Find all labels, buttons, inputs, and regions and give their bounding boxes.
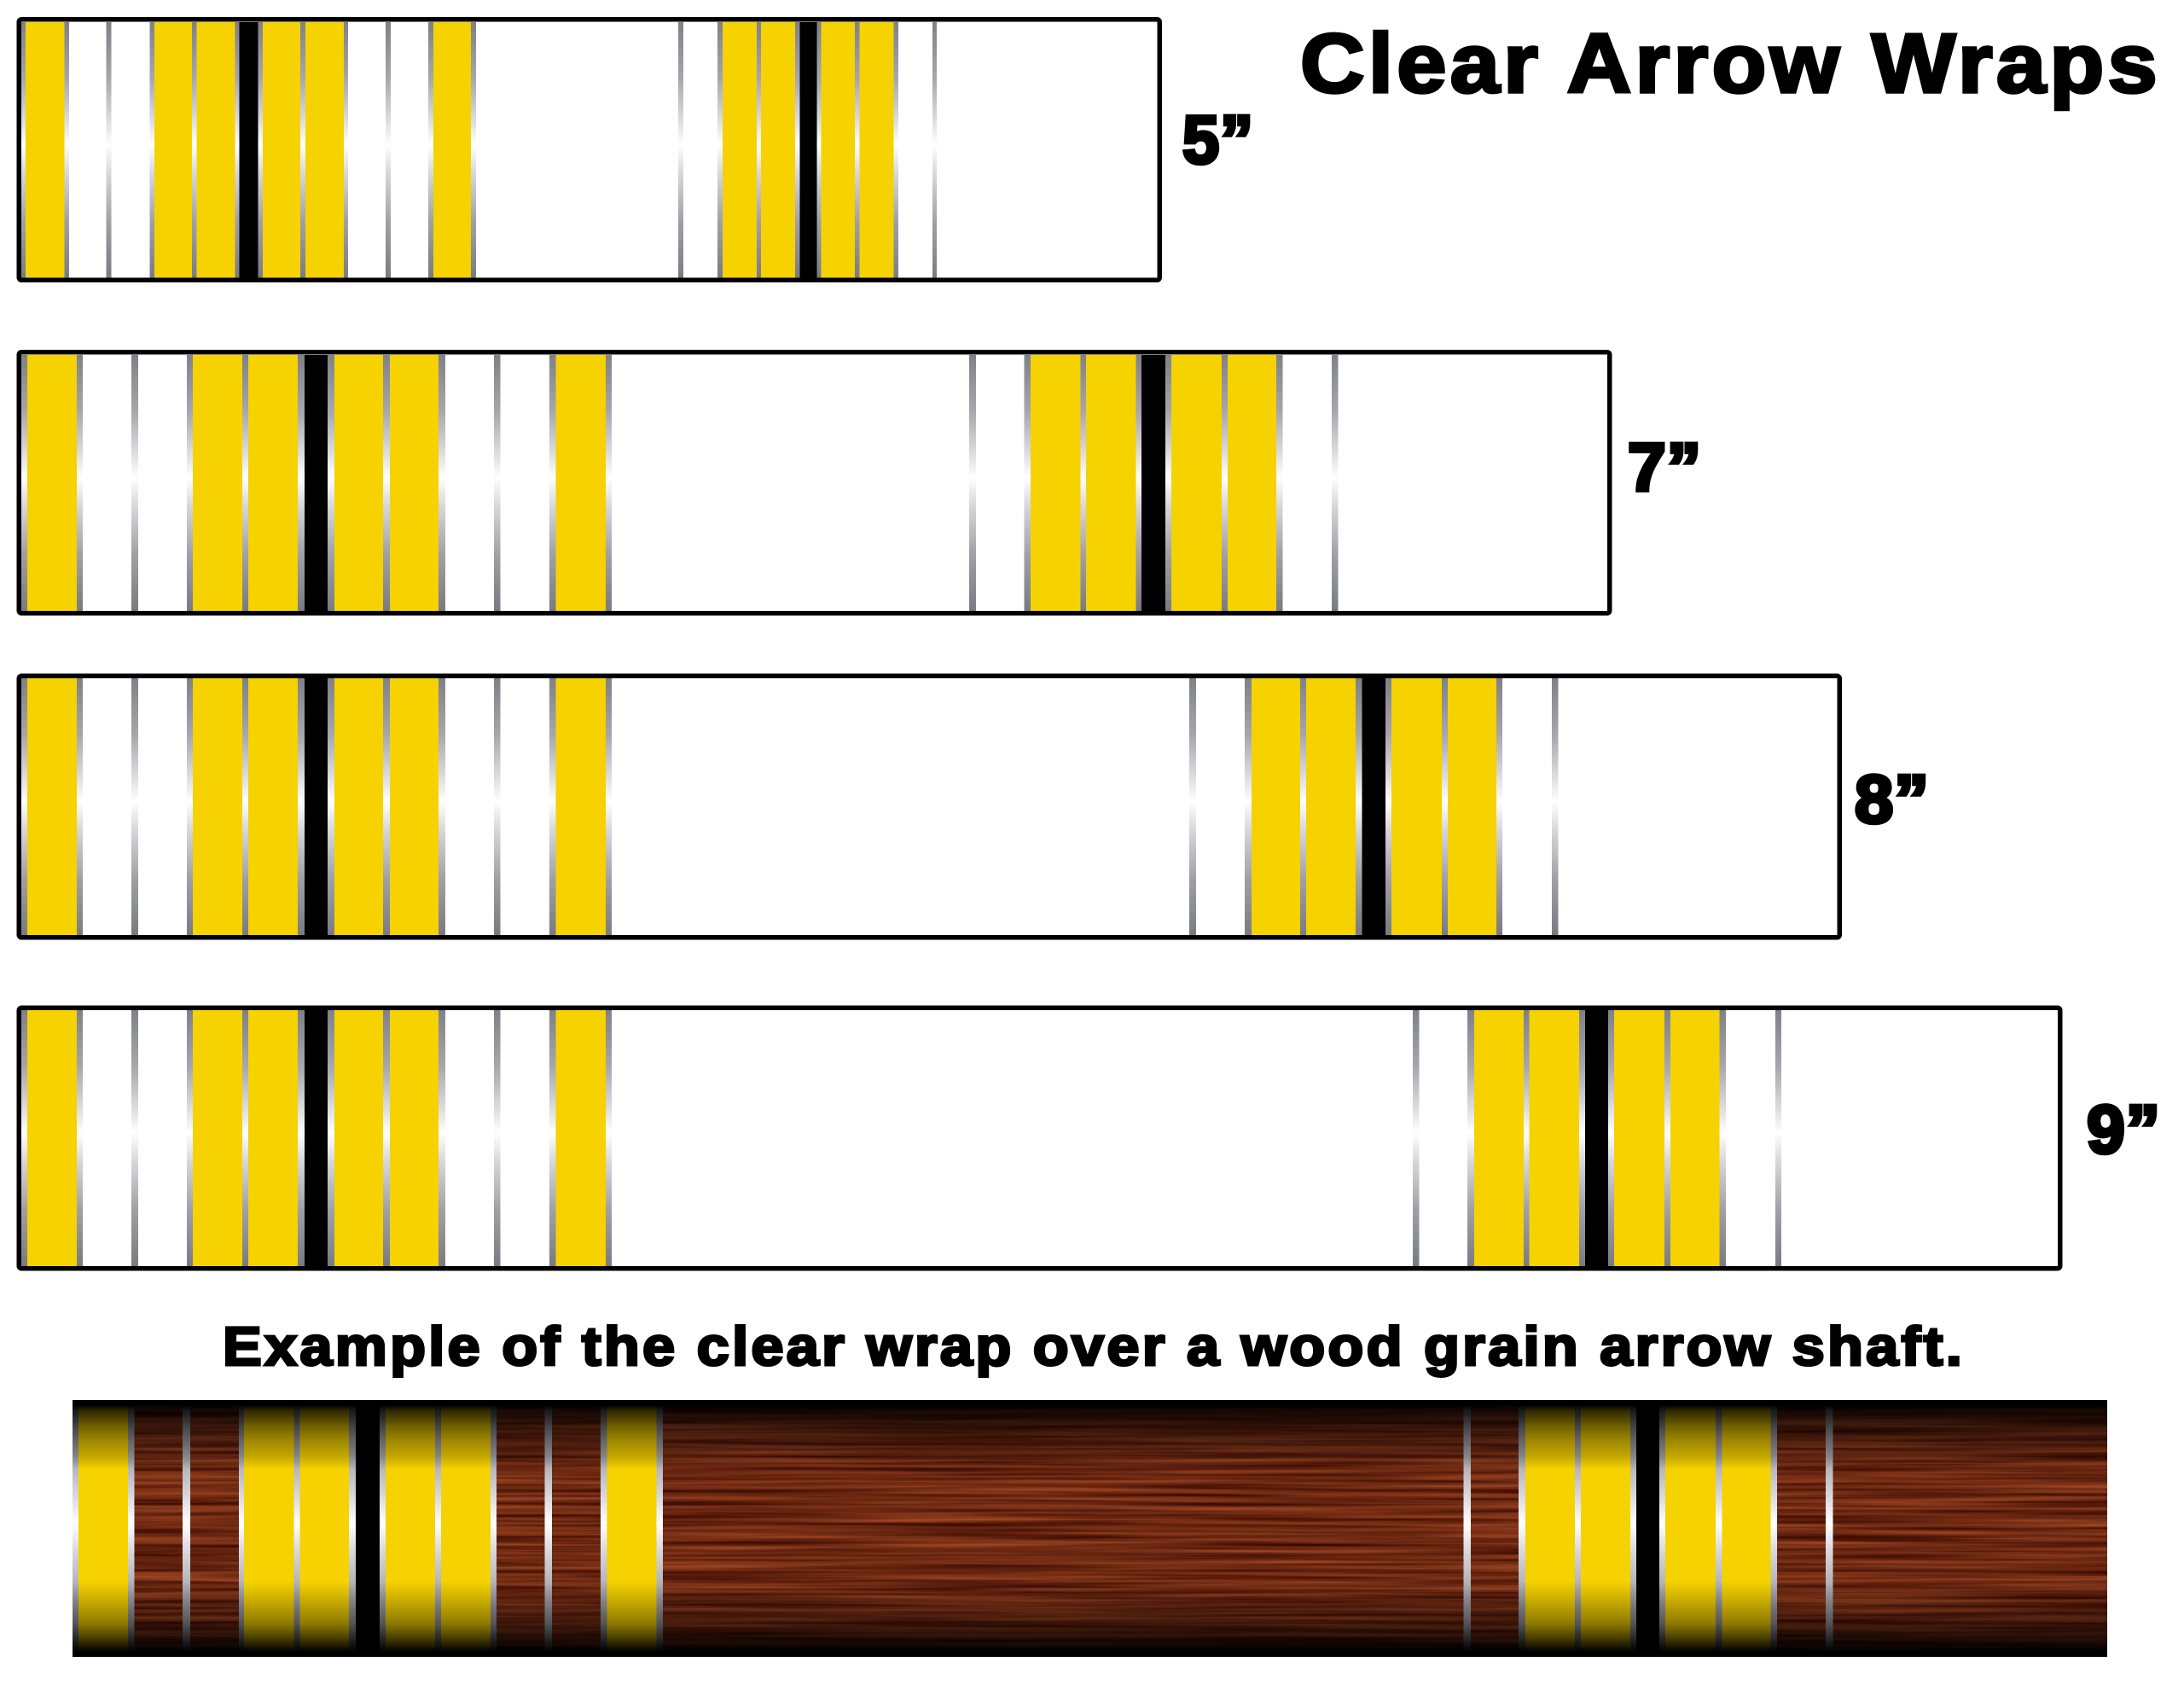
chrome stripes: 8 inch	[21, 678, 1558, 935]
yellow bands: 7 inch	[27, 355, 1276, 611]
wood grain texture	[73, 1400, 2107, 1657]
cylinder shading overlay	[73, 1400, 2107, 1657]
chrome stripes: 9 inch	[21, 1010, 1781, 1266]
yellow bands: 8 inch	[27, 678, 1496, 935]
title: Clear Arrow Wraps	[1300, 16, 2161, 110]
outline: 9 inch	[19, 1008, 2060, 1269]
yellow bands: 5 inch	[26, 22, 894, 278]
label: 7 inch: 7”	[1628, 429, 1702, 505]
label: 8 inch: 8”	[1855, 761, 1930, 837]
outline: 7 inch	[19, 352, 1610, 613]
wood arrow shaft example	[73, 1400, 2107, 1657]
panel: 5 inch wrap	[19, 20, 1159, 280]
caption: Example of the clear wrap over a wood grain arrow shaft.	[223, 1316, 1965, 1377]
black bands: 7 inch	[305, 355, 1165, 611]
panel: 9 inch wrap	[19, 1008, 2060, 1269]
black bands: 9 inch	[305, 1010, 1608, 1266]
yellow bands: 9 inch	[27, 1010, 1720, 1266]
outline: 8 inch	[19, 676, 1839, 938]
chrome stripes: 5 inch	[21, 22, 937, 278]
panel: 8 inch wrap	[19, 676, 1839, 938]
label: 9 inch: 9”	[2087, 1091, 2161, 1167]
black bands: 8 inch	[305, 678, 1385, 935]
black bands: shaft	[356, 1400, 1659, 1657]
black bands: 5 inch	[239, 22, 817, 278]
panel: 7 inch wrap	[19, 352, 1610, 613]
yellow bands: shaft	[78, 1400, 1771, 1657]
chrome stripes: 7 inch	[21, 355, 1338, 611]
label: 5 inch: 5”	[1182, 102, 1254, 177]
outline: 5 inch	[19, 20, 1159, 280]
chrome stripes: shaft	[73, 1400, 1833, 1657]
